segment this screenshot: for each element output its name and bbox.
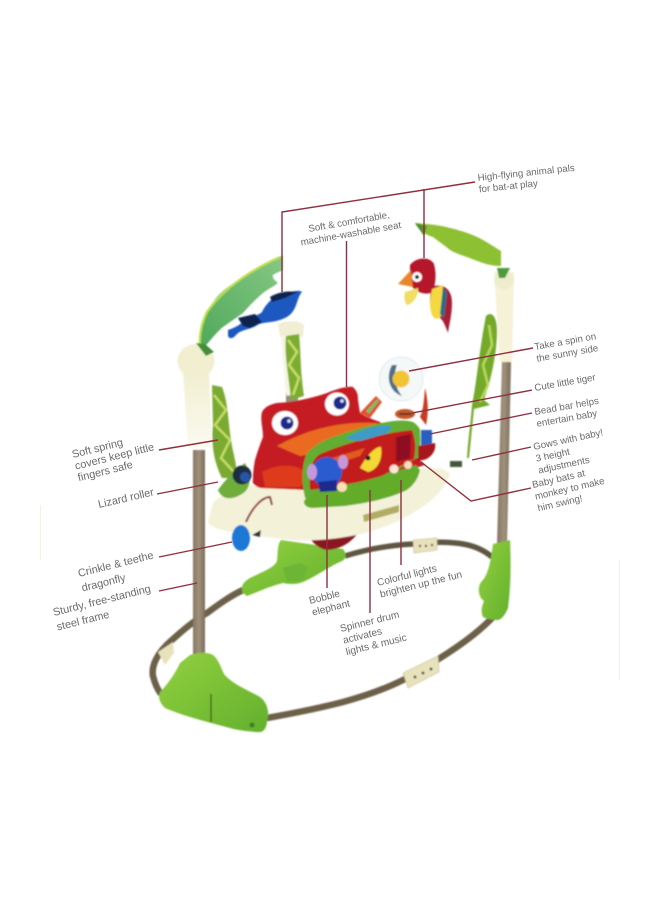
callout leader lines (157, 182, 533, 613)
label: sunny side: Take a spin on (534, 331, 597, 353)
sun spinner (379, 357, 423, 401)
ring connectors (158, 538, 439, 688)
blue side toy (418, 430, 435, 460)
parrot toy (398, 258, 452, 333)
left cream post (178, 344, 214, 448)
label: elephant: Bobble (308, 589, 341, 607)
small logo mark (450, 461, 462, 467)
label: bead bar: Bead bar helps (534, 396, 600, 418)
label: bead bar: entertain baby (536, 408, 598, 430)
label: spinner drum: activates (342, 626, 383, 647)
right leaf (415, 223, 501, 266)
tray sticker (363, 505, 399, 522)
label: elephant: elephant (311, 598, 351, 619)
label: tiger: Cute little tiger (534, 372, 597, 394)
spring cover right (467, 314, 497, 458)
poles (193, 362, 511, 657)
label: monkey: monkey to make (534, 476, 606, 503)
label: monkey: him swing! (537, 493, 584, 514)
label: height: adjustments (537, 455, 591, 476)
tiger toy (395, 409, 415, 419)
label: frame: Sturdy, free-standing (52, 583, 152, 619)
cream tray (208, 468, 450, 540)
label: spring covers: Soft spring (71, 437, 124, 461)
back left cream post (278, 321, 304, 400)
label: lights: Colorful lights (376, 563, 438, 589)
front left base (159, 653, 268, 732)
label: height: 3 height (535, 447, 571, 465)
right base (479, 540, 511, 620)
label: spinner drum: lights & music (345, 632, 408, 658)
dragonfly toy (232, 497, 272, 551)
label: lights: brighten up the fun (379, 570, 463, 601)
label: seat: machine-washable seat (300, 220, 402, 249)
blue monkey toy (228, 291, 302, 338)
label: animal pals: High-flying animal pals (477, 163, 575, 184)
fish toy and lights (337, 447, 412, 492)
activity arch (303, 420, 420, 498)
label: height: Gows with baby! (532, 427, 604, 453)
label: monkey: Baby bats at (531, 468, 586, 491)
seat eyes (272, 392, 349, 435)
label: sunny side: the sunny side (536, 343, 599, 365)
label: spring covers: fingers safe (77, 459, 134, 484)
rainbow arch (360, 388, 428, 425)
label: frame: steel frame (55, 609, 111, 633)
jumper product illustration (153, 223, 514, 732)
bobble elephant (307, 455, 348, 492)
label: lizard: Lizard roller (97, 486, 155, 511)
right cream post (494, 268, 514, 362)
activity tray (304, 465, 420, 508)
label: dragonfly: Crinkle & teethe (77, 550, 155, 580)
lizard roller (218, 463, 252, 498)
label: animal pals: for bat-at play (478, 178, 539, 195)
left leaf (196, 255, 283, 356)
label: seat: Soft & comfortable, (308, 210, 391, 235)
spring cover left (212, 385, 236, 478)
label: dragonfly: dragonfly (80, 572, 127, 594)
label: spring covers: covers keep little (74, 441, 155, 473)
back centre base (242, 533, 358, 596)
red seat (253, 387, 425, 490)
label: spinner drum: Spinner drum (339, 610, 401, 635)
base ring (153, 542, 493, 718)
